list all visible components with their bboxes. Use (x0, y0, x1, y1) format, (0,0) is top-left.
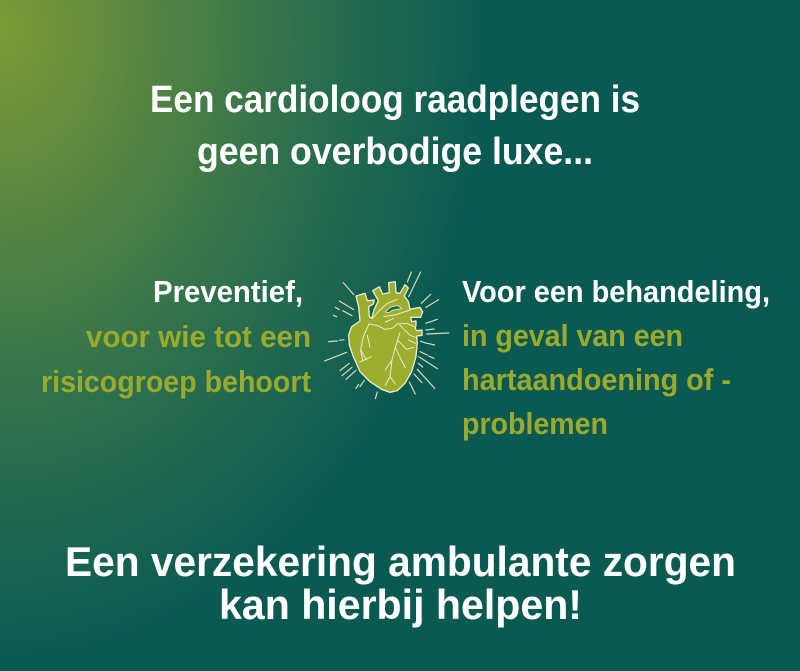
text block: preventief: voor wie tot een (86, 319, 311, 354)
closing statement: kan hierbij helpen! (219, 581, 582, 628)
text block: preventief: risicogroep behoort (41, 364, 311, 399)
icon heart details (360, 299, 415, 385)
text block: behandeling (462, 274, 770, 441)
title: geen overbodige luxe... (197, 131, 593, 173)
text block: behandeling: in geval van een (462, 318, 683, 353)
title: Een cardioloog raadplegen is (150, 79, 640, 121)
text block: preventief (41, 274, 311, 399)
closing statement: Een verzekering ambulante zorgen (65, 538, 736, 585)
icon heart body (349, 282, 423, 392)
text block: behandeling: problemen (462, 406, 608, 441)
text block: preventief: Preventief, (153, 274, 303, 309)
text block: behandeling: hartaandoening of - (462, 362, 731, 397)
icon heart gap (385, 305, 402, 313)
closing statement (65, 538, 736, 628)
text block: behandeling: Voor een behandeling, (462, 274, 770, 309)
icon: anatomical heart with rays (325, 272, 449, 399)
icon rays (325, 272, 449, 399)
title (150, 79, 640, 173)
